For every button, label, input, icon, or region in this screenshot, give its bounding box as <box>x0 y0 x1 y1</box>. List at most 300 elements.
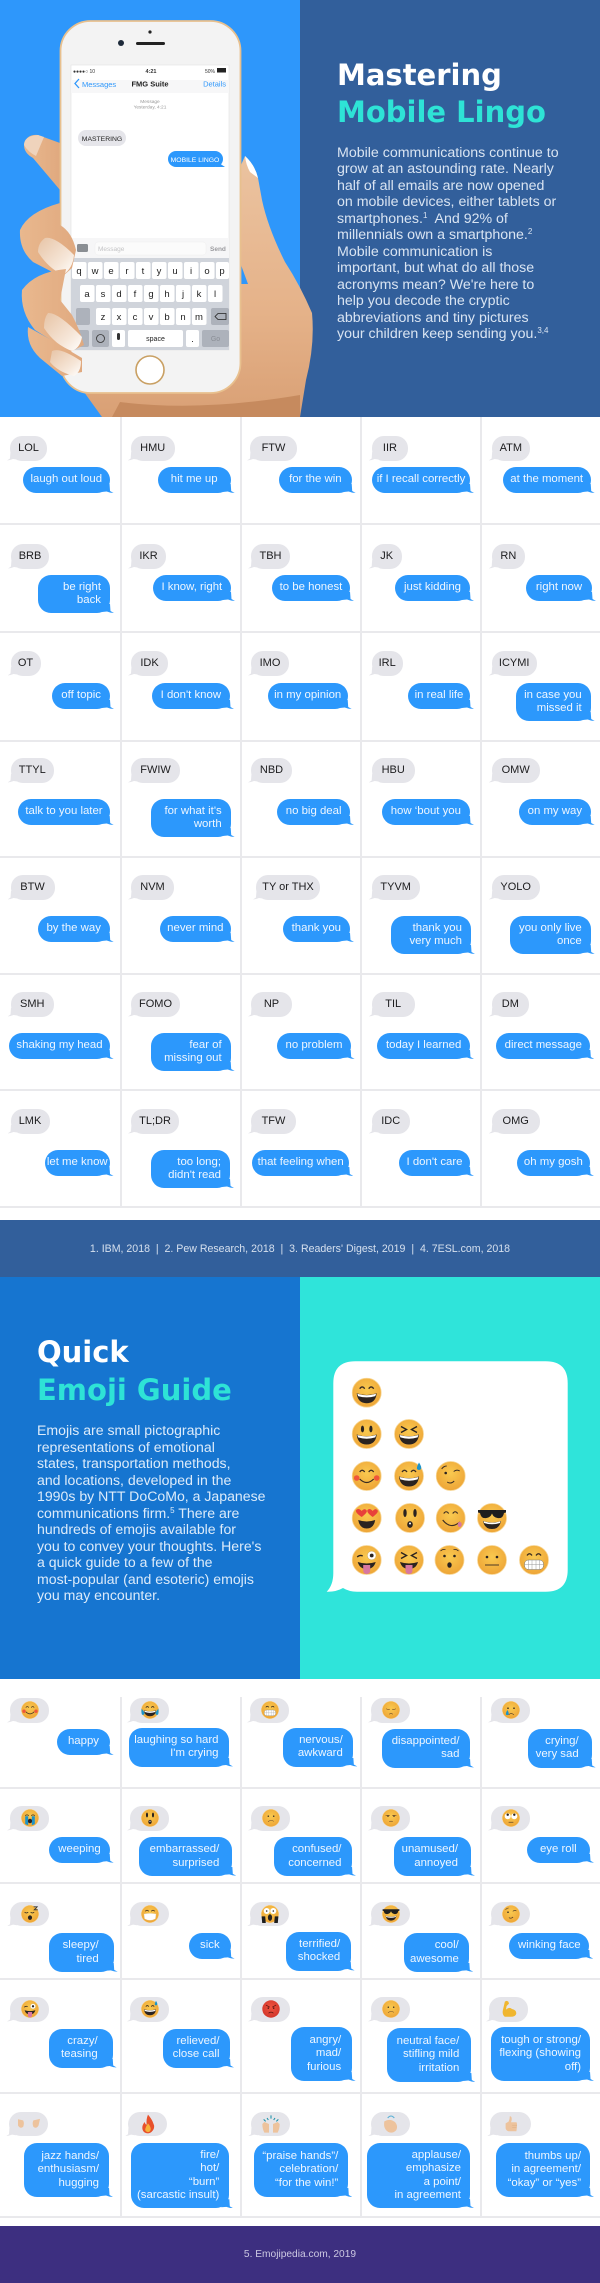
meaning bubble: off topic <box>61 689 101 701</box>
meaning bubble: winking face <box>518 1939 581 1951</box>
acronym bubble <box>492 651 537 676</box>
meaning bubble <box>139 1837 232 1876</box>
acronym bubble: JK <box>380 550 393 562</box>
meaning bubble: shocked <box>298 1951 340 1963</box>
meaning bubble: laughing so hard <box>134 1734 218 1746</box>
meaning bubble: thank you <box>292 922 341 934</box>
acronym cell: FTW <box>248 436 356 493</box>
meaning bubble <box>509 1933 589 1959</box>
meaning bubble <box>283 916 350 942</box>
emoji source text: 5. Emojipedia.com, 2019 <box>244 2248 356 2260</box>
phone keyboard: y <box>157 266 162 277</box>
acronym bubble <box>251 758 292 782</box>
meaning bubble: to be honest <box>280 581 342 593</box>
meaning bubble: hugging <box>58 2177 99 2189</box>
emoji bubble <box>251 2112 290 2136</box>
acronym bubble: NP <box>264 998 279 1010</box>
acronym bubble: TIL <box>385 998 401 1010</box>
phone keyboard: x <box>117 312 122 323</box>
meaning bubble <box>404 1933 469 1972</box>
meaning bubble: didn't read <box>168 1169 221 1181</box>
acronym bubble: IMO <box>260 657 280 669</box>
phone keyboard: k <box>197 289 202 300</box>
emoji: sweat smile <box>394 1462 424 1490</box>
intro text block: Mobile communications continue to <box>337 144 559 160</box>
meaning bubble: fear of <box>189 1039 222 1051</box>
meaning bubble <box>286 1932 351 1970</box>
heading line: Mastering: Mastering <box>337 58 502 92</box>
meaning bubble: very sad <box>536 1748 579 1760</box>
acronym bubble: ATM <box>500 442 522 454</box>
acronym bubble <box>10 436 47 460</box>
acronym bubble <box>492 436 530 460</box>
phone keyboard: o <box>204 266 210 277</box>
emoji: heart eyes <box>352 1504 381 1532</box>
meaning bubble: emphasize <box>406 2162 461 2174</box>
meaning bubble: I'm crying <box>170 1747 218 1759</box>
phone status bar: 4:21 <box>145 69 157 75</box>
emoji cell: disappointed/sad <box>360 1697 480 1787</box>
emoji: wink <box>436 1462 465 1490</box>
meaning bubble: jazz hands/ <box>41 2150 99 2162</box>
emoji: neutral <box>478 1546 506 1574</box>
meaning bubble <box>129 1728 229 1766</box>
meaning bubble: you only live <box>519 922 582 934</box>
phone status bar: ●●●●○ 10 <box>73 69 95 75</box>
meaning bubble <box>57 1729 110 1755</box>
acronym grid <box>0 417 600 1208</box>
meaning bubble <box>151 1033 231 1071</box>
acronym bubble <box>131 758 180 782</box>
meaning bubble: teasing <box>61 2048 98 2060</box>
acronym cell: BTW <box>8 875 114 942</box>
acronym cell: NP <box>248 992 354 1059</box>
phone keyboard: j <box>181 289 184 300</box>
meaning bubble: for the win <box>289 473 342 485</box>
acronym cell: RN <box>489 544 596 601</box>
meaning bubble <box>408 683 470 709</box>
phone status bar <box>73 68 226 75</box>
emoji: grinning <box>352 1378 381 1407</box>
emoji cell: applause <box>360 2093 480 2216</box>
emoji: laughing <box>394 1420 424 1448</box>
meaning bubble: missing out <box>164 1052 222 1064</box>
acronym cell: YOLO <box>489 875 594 954</box>
meaning bubble: (sarcastic insult) <box>137 2189 219 2201</box>
meaning bubble <box>158 467 231 493</box>
meaning bubble: terrified/ <box>299 1938 340 1950</box>
emoji bubble <box>491 1698 530 1722</box>
phone keyboard: u <box>172 266 178 277</box>
meaning bubble: shaking my head <box>16 1039 103 1051</box>
acronym bubble: NBD <box>260 764 283 776</box>
acronym cell: TBH <box>248 544 354 601</box>
meaning bubble <box>394 1837 471 1876</box>
meaning bubble: very much <box>409 935 462 947</box>
phone message: MASTERING: MASTERING <box>82 136 122 143</box>
acronym bubble <box>372 544 402 568</box>
phone timestamp <box>134 99 167 110</box>
emoji: sunglasses <box>478 1504 506 1532</box>
emoji cell: terrified/shocked <box>240 1883 360 1978</box>
phone keyboard <box>72 262 229 347</box>
meaning bubble <box>279 467 352 493</box>
white message bubble <box>327 1361 568 1592</box>
acronym bubble <box>372 875 420 900</box>
acronym bubble: FWIW <box>140 764 171 776</box>
acronym cell: NBD <box>248 758 354 825</box>
phone keyboard: Go <box>211 336 220 343</box>
phone keyboard: f <box>134 289 137 300</box>
meaning bubble: I don't care <box>406 1156 462 1168</box>
meaning bubble <box>291 2027 352 2081</box>
meaning bubble <box>151 1150 230 1188</box>
acronym cell: HMU <box>128 436 234 493</box>
emoji bubble <box>10 1902 49 1926</box>
heading line: Mobile Lingo: Mobile Lingo <box>337 95 546 129</box>
meaning bubble: just kidding <box>404 581 461 593</box>
emoji: smiling <box>352 1420 381 1448</box>
acronym cell: TTYL <box>8 758 114 825</box>
meaning bubble: unamused/ <box>402 1843 458 1855</box>
acronym cell: LOL <box>8 436 114 493</box>
emoji bubble <box>251 1997 290 2022</box>
emoji cell: weeping <box>0 1788 120 1882</box>
illustration: hand holding phone <box>20 20 313 417</box>
acronym cell: IIR <box>369 436 474 493</box>
emoji intro text block: you may encounter. <box>37 1587 160 1603</box>
panel: dark blue intro background <box>300 0 600 417</box>
meaning bubble <box>52 683 110 709</box>
meaning bubble: disappointed/ <box>392 1735 459 1747</box>
acronym bubble: YOLO <box>500 881 531 893</box>
phone timestamp: Message <box>140 99 160 105</box>
meaning bubble: sick <box>200 1939 220 1951</box>
emoji intro text block <box>37 1422 266 1604</box>
emoji intro text block: communications firm.5 There are <box>37 1504 239 1520</box>
emoji: surprised <box>396 1504 424 1532</box>
acronym bubble: TYVM <box>380 881 411 893</box>
acronym bubble <box>251 992 292 1016</box>
acronym bubble <box>492 544 525 568</box>
meaning bubble: right now <box>536 581 582 593</box>
meaning bubble: in case you <box>524 689 582 701</box>
acronym cell: IKR <box>128 544 235 601</box>
phone message input <box>77 242 226 255</box>
phone status bar: 50% <box>205 69 216 75</box>
meaning bubble: how ‘bout you <box>391 805 461 817</box>
meaning bubble: furious <box>307 2061 341 2073</box>
phone navigation bar: Details <box>203 80 226 88</box>
acronym bubble <box>492 992 529 1016</box>
meaning bubble: confused/ <box>292 1843 341 1855</box>
intro text block: half of all emails are now opened <box>337 178 544 194</box>
meaning bubble <box>160 916 231 942</box>
acronym bubble: TTYL <box>19 764 46 776</box>
meaning bubble: talk to you later <box>25 805 103 817</box>
acronym cell: TFW <box>248 1109 353 1176</box>
meaning bubble: once <box>557 935 582 947</box>
meaning bubble: nervous/ <box>299 1734 343 1746</box>
meaning bubble <box>503 467 591 493</box>
acronym bubble: IRL <box>379 657 396 669</box>
emoji cell: crazy/teasing <box>0 1979 120 2092</box>
phone keyboard: . <box>191 334 194 345</box>
meaning bubble: a point/ <box>424 2176 461 2188</box>
emoji cell: embarrassed/surprised <box>120 1788 240 1882</box>
emoji cell: nervous/awkward <box>240 1697 360 1787</box>
acronym cell: BRB <box>8 544 114 613</box>
intro text block: smartphones.1 And 92% of <box>337 210 508 226</box>
emoji intro text block: representations of emotional <box>37 1438 215 1454</box>
meaning bubble <box>153 575 231 601</box>
meaning bubble: never mind <box>167 922 224 934</box>
emoji cell: neutral face <box>360 1979 480 2092</box>
acronym cell: TIL <box>369 992 474 1059</box>
acronym cell: LMK <box>8 1109 114 1176</box>
meaning bubble: neutral face/ <box>397 2035 459 2047</box>
acronym bubble <box>131 651 168 676</box>
emoji cell: winking face <box>480 1883 600 1978</box>
meaning bubble: “okay” or “yes” <box>508 2177 581 2189</box>
meaning bubble <box>49 1837 110 1863</box>
phone keyboard: w <box>91 266 99 277</box>
acronym bubble <box>372 651 403 676</box>
emoji: astonished <box>435 1546 464 1574</box>
acronym bubble: OMG <box>503 1115 529 1127</box>
acronym cell: SMH <box>8 992 114 1059</box>
meaning bubble: tough or strong/ <box>501 2034 581 2046</box>
emoji intro text block: you to convey your thoughts. Here's <box>37 1538 261 1554</box>
emoji guide intro panel <box>0 1277 300 1679</box>
acronym bubble: SMH <box>20 998 44 1010</box>
acronym bubble <box>10 1109 50 1134</box>
meaning bubble: relieved/ <box>176 2035 220 2047</box>
meaning bubble: for what it's <box>164 805 222 817</box>
phone keyboard: n <box>180 312 186 323</box>
emoji bubble <box>250 1902 289 1926</box>
meaning bubble: eye roll <box>540 1843 577 1855</box>
emoji bubble <box>250 1698 289 1722</box>
acronym bubble: TL;DR <box>139 1115 171 1127</box>
meaning bubble: that feeling when <box>258 1156 344 1168</box>
acronym cell: OMG <box>489 1109 594 1176</box>
emoji bubble <box>371 1698 410 1722</box>
phone message input: Message <box>98 246 125 253</box>
meaning bubble <box>526 575 592 601</box>
meaning bubble <box>24 2143 109 2197</box>
acronym bubble: HMU <box>140 442 165 454</box>
meaning bubble: no big deal <box>286 805 342 817</box>
emoji cell: tough or strong <box>480 1979 600 2092</box>
acronym bubble: NVM <box>140 881 165 893</box>
acronym cell: IMO <box>248 651 352 709</box>
meaning bubble: awesome <box>410 1953 459 1965</box>
emoji intro text block: hundreds of emojis available for <box>37 1521 236 1537</box>
meaning bubble: “for the win!” <box>275 2177 338 2189</box>
panel: blue phone background <box>0 0 300 417</box>
emoji: yum <box>436 1504 465 1532</box>
acronym bubble <box>492 875 540 900</box>
phone keyboard: t <box>142 266 145 277</box>
meaning bubble: crazy/ <box>67 2035 98 2047</box>
meaning bubble: applause/ <box>412 2149 461 2161</box>
phone keyboard: g <box>148 289 154 300</box>
meaning bubble: mad/ <box>316 2047 341 2059</box>
emoji bubble <box>10 1806 49 1830</box>
emoji sample panel <box>300 1277 600 1679</box>
meaning bubble: “praise hands”/ <box>262 2150 338 2162</box>
acronym bubble: IIR <box>383 442 397 454</box>
meaning bubble <box>254 2143 348 2197</box>
meaning bubble: cool/ <box>435 1939 459 1951</box>
meaning bubble <box>382 1729 470 1768</box>
meaning bubble <box>252 1150 349 1176</box>
emoji: crazy <box>352 1546 381 1574</box>
emoji bubble <box>371 2112 410 2136</box>
acronym cell: TY or THX <box>254 875 354 942</box>
phone keyboard: m <box>195 312 203 323</box>
meaning bubble <box>372 467 470 493</box>
meaning bubble: “burn” <box>189 2176 219 2188</box>
acronym bubble <box>131 992 180 1016</box>
intro text block: on mobile devices, either tablets or <box>337 194 556 210</box>
meaning bubble: crying/ <box>545 1735 579 1747</box>
meaning bubble <box>49 2029 113 2068</box>
intro text block: important, but what do all those <box>337 260 534 276</box>
meaning bubble <box>517 1150 590 1176</box>
phone message: MASTERING <box>78 130 126 146</box>
meaning bubble <box>277 1033 351 1059</box>
emoji cell: sleepy/tired <box>0 1883 120 1978</box>
acronym cell: FWIW <box>128 758 234 837</box>
acronym bubble <box>131 436 175 460</box>
phone keyboard: z <box>101 312 106 323</box>
phone keyboard: i <box>190 266 192 277</box>
meaning bubble: let me know <box>47 1156 108 1168</box>
emoji cell: confused/concerned <box>240 1788 360 1882</box>
meaning bubble: sleepy/ <box>63 1939 99 1951</box>
heading line: Quick: Quick <box>37 1335 129 1369</box>
sources footer bar <box>0 1220 600 1277</box>
meaning bubble <box>528 1729 592 1768</box>
acronym bubble <box>256 875 320 900</box>
phone navigation bar <box>75 79 226 89</box>
phone keyboard: v <box>149 312 154 323</box>
emoji bubble <box>130 1806 169 1830</box>
acronym bubble <box>10 992 54 1016</box>
title: Mastering Mobile Lingo <box>337 58 546 129</box>
meaning bubble <box>277 799 350 825</box>
acronym bubble: LOL <box>18 442 39 454</box>
phone keyboard: d <box>116 289 122 300</box>
acronym bubble <box>492 758 540 782</box>
meaning bubble <box>272 575 350 601</box>
meaning bubble: awkward <box>298 1747 343 1759</box>
emoji: blushing <box>352 1462 381 1490</box>
meaning bubble <box>283 1728 353 1766</box>
meaning bubble: thank you <box>413 922 462 934</box>
meaning bubble: on my way <box>528 805 582 817</box>
acronym bubble <box>251 1109 296 1134</box>
meaning bubble: be right <box>63 581 101 593</box>
phone timestamp: Yesterday, 4:21 <box>134 104 167 110</box>
acronym bubble: OT <box>18 657 33 669</box>
emoji source footer bar <box>0 2226 600 2283</box>
meaning bubble: I know, right <box>161 581 222 593</box>
acronym cell: IRL <box>369 651 474 709</box>
phone message: MOBILE LINGO <box>168 151 225 167</box>
meaning bubble: at the moment <box>510 473 583 485</box>
emoji: grimace <box>520 1546 548 1574</box>
phone keyboard: b <box>164 312 170 323</box>
emoji bubble <box>489 1997 528 2022</box>
phone keyboard: c <box>133 312 138 323</box>
meaning bubble <box>9 1033 110 1059</box>
emoji bubble <box>371 1997 410 2022</box>
meaning bubble <box>23 467 110 493</box>
phone keyboard: a <box>84 289 90 300</box>
phone navigation bar: FMG Suite <box>131 80 169 88</box>
meaning bubble <box>496 2143 590 2197</box>
meaning bubble: in my opinion <box>274 689 341 701</box>
emoji bubble <box>130 1698 169 1722</box>
meaning bubble: hot/ <box>200 2162 219 2174</box>
acronym cell: JK <box>369 544 474 601</box>
meaning bubble <box>18 799 110 825</box>
acronym bubble: LMK <box>19 1115 41 1127</box>
acronym bubble <box>492 1109 540 1134</box>
acronym bubble: TY or THX <box>262 881 314 893</box>
meaning bubble: embarrassed/ <box>150 1843 219 1855</box>
phone keyboard: h <box>164 289 170 300</box>
meaning bubble <box>516 683 591 721</box>
acronym bubble: TFW <box>262 1115 285 1127</box>
acronym cell: OMW <box>489 758 594 825</box>
emoji cell: sick <box>120 1883 240 1978</box>
acronym bubble <box>131 1109 179 1134</box>
acronym bubble: IDC <box>381 1115 400 1127</box>
emoji cell: crying/very sad <box>480 1697 600 1787</box>
meaning bubble: in agreement/ <box>511 2163 581 2175</box>
hero section <box>0 0 600 417</box>
intro text block: abbreviations and tiny pictures <box>337 310 529 326</box>
phone keyboard: space <box>146 336 165 343</box>
intro text block: acronyms mean? We're here to <box>337 276 534 292</box>
emoji cell: unamused/annoyed <box>360 1788 480 1882</box>
acronym cell: ICYMI <box>489 651 594 721</box>
meaning bubble: laugh out loud <box>30 473 102 485</box>
meaning bubble <box>519 799 591 825</box>
phone keyboard: r <box>125 266 129 277</box>
acronym bubble: RN <box>500 550 516 562</box>
emoji bubble <box>371 1902 410 1926</box>
emoji cell: happy <box>0 1697 120 1787</box>
meaning bubble <box>510 916 591 954</box>
acronym bubble <box>250 436 297 460</box>
emoji intro text block: Emojis are small pictographic <box>37 1422 220 1438</box>
meaning bubble <box>38 916 110 942</box>
meaning bubble: if I recall correctly <box>377 473 465 485</box>
acronym cell: ATM <box>489 436 594 493</box>
acronym bubble: FTW <box>262 442 285 454</box>
emoji cell: angry/mad/furious <box>240 1979 360 2092</box>
emoji bubble <box>10 1997 49 2022</box>
emoji cell: thumbs up <box>480 2093 600 2216</box>
meaning bubble <box>268 683 348 709</box>
meaning bubble <box>377 1033 470 1059</box>
meaning bubble: tired <box>77 1953 99 1965</box>
